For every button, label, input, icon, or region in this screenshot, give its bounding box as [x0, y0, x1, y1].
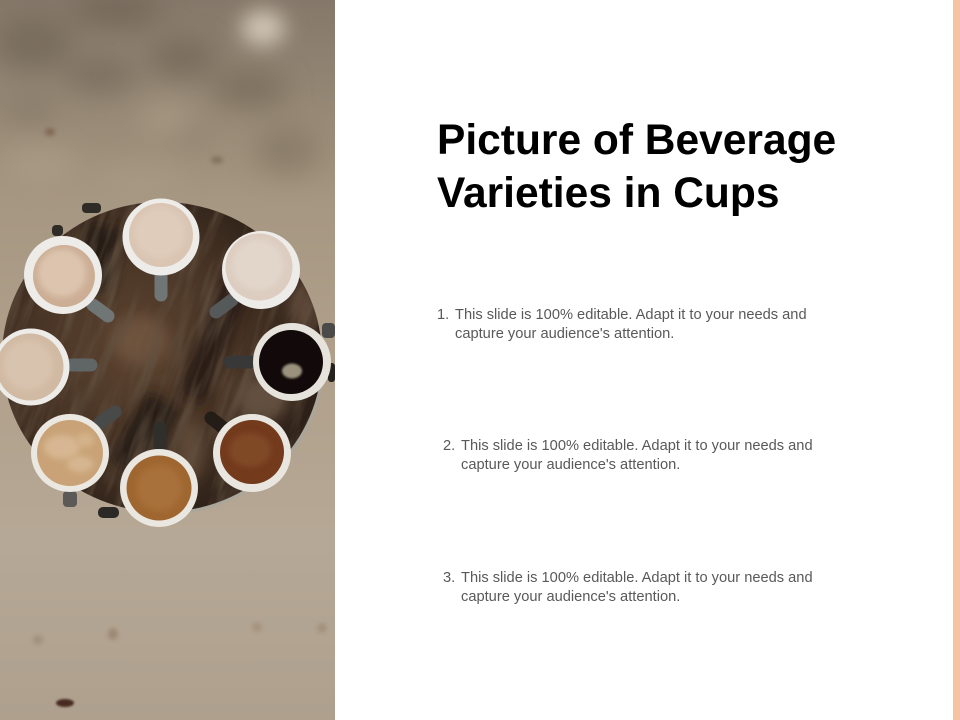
cup 5: black coffee, right [253, 323, 331, 401]
floor mottling [0, 0, 319, 192]
list item 2 [443, 438, 813, 473]
list item 1: 1. [437, 307, 449, 323]
cup 8: caramel coffee, bottom [120, 449, 198, 527]
list item 1: This slide is 100% editable. Adapt it to your needs and [455, 307, 807, 323]
list item 2: capture your audience's attention. [461, 457, 680, 473]
cup 3: pale milk, upper right [222, 231, 300, 309]
table top [2, 202, 320, 510]
accent stripe [953, 0, 960, 720]
list item 1: capture your audience's attention. [455, 326, 674, 342]
cup 4: milky tea, left [0, 328, 70, 406]
photo: cups of beverages on a round wooden table [0, 0, 335, 720]
cup 7: dark brown coffee, lower right [213, 414, 291, 492]
cup 1: pale latte, top [122, 198, 200, 276]
list item 2: 2. [443, 438, 455, 454]
cup 6: foamy latte, lower left [31, 414, 109, 492]
list item 3: capture your audience's attention. [461, 589, 680, 605]
cup handles [72, 275, 250, 448]
table rim [190, 385, 321, 511]
list item 1 [437, 307, 807, 342]
list item 3 [443, 570, 813, 605]
title [437, 116, 836, 216]
list item 3: 3. [443, 570, 455, 586]
list item 3: This slide is 100% editable. Adapt it to your needs and [461, 570, 813, 586]
list item 2: This slide is 100% editable. Adapt it to your needs and [461, 438, 813, 454]
table legs [52, 203, 335, 518]
title: Varieties in Cups [437, 170, 780, 216]
top glare [241, 10, 285, 46]
floor stains [33, 128, 327, 645]
title: Picture of Beverage [437, 116, 836, 164]
cup 2: milky tea, upper left [24, 236, 102, 314]
